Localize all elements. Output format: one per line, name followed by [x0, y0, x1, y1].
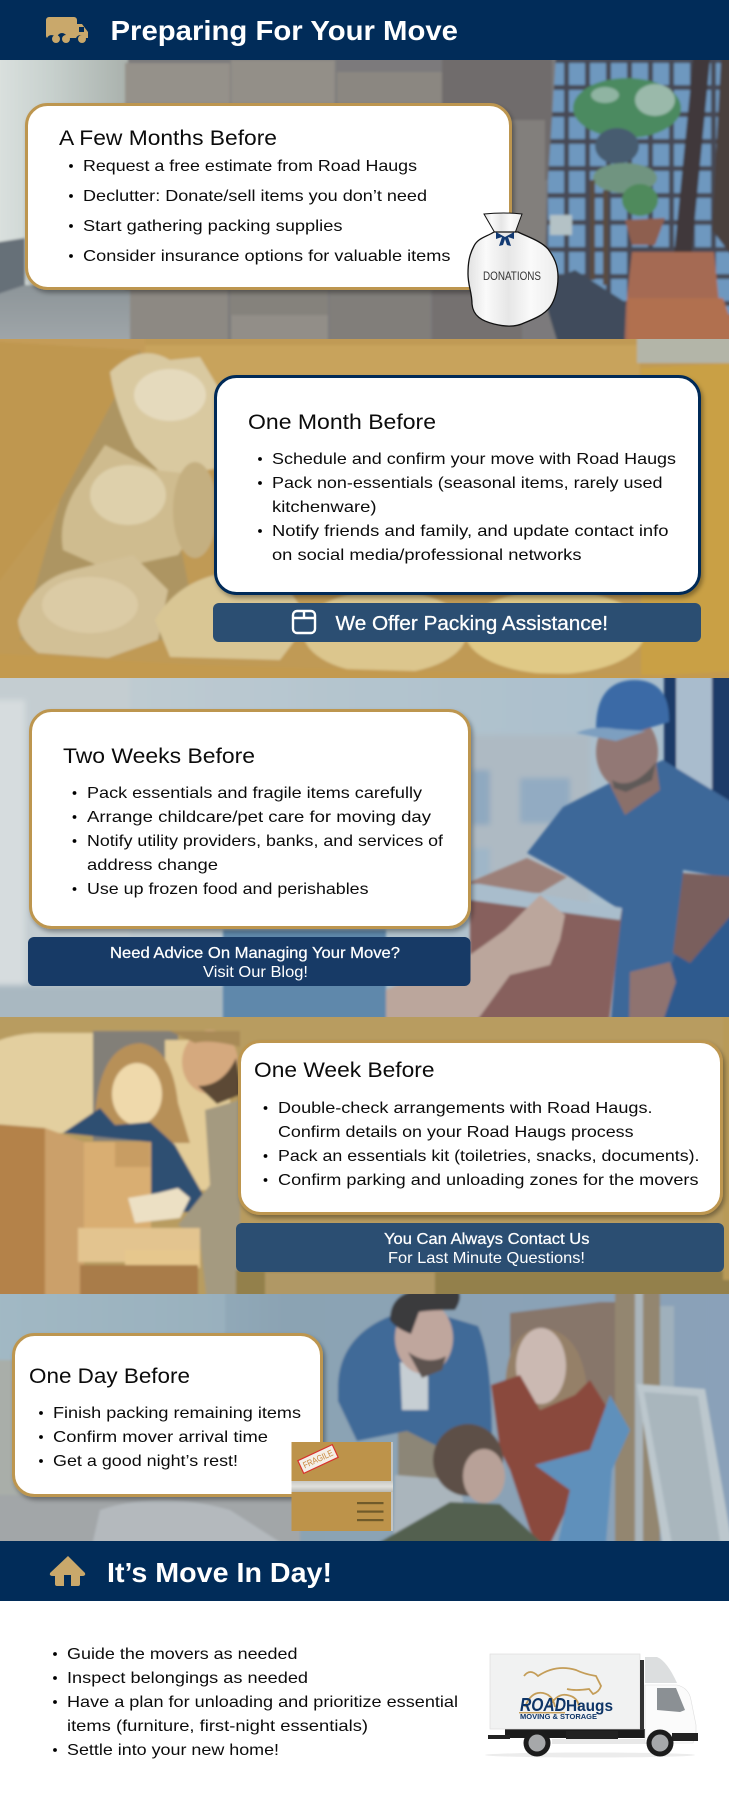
logo: road haugs: ROAD — [520, 1695, 566, 1715]
icon: road haugs moving truck — [485, 1654, 698, 1758]
panel: one day before — [0, 1294, 729, 1541]
bullet list: Pack non-essentials (seasonal items, rarely used — [272, 475, 662, 492]
header: it's move in day — [0, 1541, 729, 1601]
bullet list: Request a free estimate from Road Haugs — [83, 158, 417, 175]
panel: move in day checklist — [0, 1601, 729, 1811]
title: preparing for your move: Preparing For Your Move — [110, 15, 458, 46]
bullet list — [69, 158, 450, 265]
bullet list: Consider insurance options for valuable items — [83, 248, 450, 265]
icon: donations bag — [468, 213, 558, 326]
icon: package — [293, 611, 315, 633]
bullet list: Pack essentials and fragile items carefully — [87, 785, 422, 802]
icon: moving truck — [46, 17, 88, 43]
bullet list: Pack an essentials kit (toiletries, snacks, documents). — [278, 1148, 700, 1165]
banner: need advice on managing your move — [28, 937, 470, 986]
bullet list — [258, 451, 676, 564]
bullet list — [53, 1646, 458, 1759]
panel: one week before — [0, 1017, 729, 1294]
bullet list: Confirm parking and unloading zones for the movers — [278, 1172, 698, 1189]
heading: Two Weeks Before — [63, 744, 255, 768]
header: preparing for your move — [0, 0, 729, 60]
banner: need advice on managing your move: Need Advice On Managing Your Move? — [110, 945, 400, 962]
icon: donations bag: DONATIONS — [483, 269, 541, 283]
bullet list — [39, 1405, 301, 1470]
banner: we offer packing assistance — [213, 603, 701, 642]
heading: A Few Months Before — [59, 126, 277, 150]
photo: mover handing over a box — [0, 678, 729, 1017]
card: a few months before — [26, 104, 510, 288]
bullet list: items (furniture, first-night essentials) — [67, 1718, 368, 1735]
heading: One Day Before — [29, 1364, 190, 1388]
bullet list: address change — [87, 857, 218, 874]
bullet list: Schedule and confirm your move with Road Haugs — [272, 451, 676, 468]
panel: one month before — [0, 339, 729, 678]
banner: you can always contact us — [236, 1223, 724, 1272]
label: fragile sticker: FRAGILE — [301, 1448, 335, 1470]
card: one day before — [14, 1334, 322, 1496]
panel: two weeks before — [0, 678, 729, 1017]
bullet list: Notify utility providers, banks, and services of — [87, 833, 444, 850]
title: it's move in day: It’s Move In Day! — [107, 1557, 332, 1588]
bullet list: Notify friends and family, and update contact info — [272, 523, 669, 540]
heading: One Week Before — [254, 1058, 434, 1082]
bullet list: kitchenware) — [272, 499, 376, 516]
photo: couple packing boxes — [0, 1017, 729, 1294]
card: two weeks before — [30, 710, 470, 928]
photo: paper-wrapped items in box — [0, 339, 729, 678]
bullet list: Confirm mover arrival time — [53, 1429, 268, 1446]
logo: road haugs — [519, 1668, 613, 1721]
logo: road haugs: Haugs — [566, 1698, 613, 1715]
heading: One Month Before — [248, 410, 436, 434]
bullet list: Use up frozen food and perishables — [87, 881, 369, 898]
card: one week before — [240, 1042, 722, 1214]
banner: need advice on managing your move: Visit Our Blog! — [203, 964, 308, 981]
bullet list: Settle into your new home! — [67, 1742, 279, 1759]
card: one month before — [216, 376, 700, 594]
bullet list: Double-check arrangements with Road Haugs. — [278, 1100, 652, 1117]
icon: fragile box — [292, 1442, 393, 1531]
panel: a few months before — [0, 60, 729, 339]
bullet list: Guide the movers as needed — [67, 1646, 298, 1663]
bullet list: Have a plan for unloading and prioritize essential — [67, 1694, 458, 1711]
bullet list: Get a good night’s rest! — [53, 1453, 238, 1470]
photo: stacked boxes and window plants — [0, 60, 729, 339]
logo: road haugs: MOVING & STORAGE — [520, 1714, 597, 1721]
bullet list: Arrange childcare/pet care for moving day — [87, 809, 431, 826]
bullet list — [264, 1100, 700, 1189]
banner: we offer packing assistance: We Offer Packing Assistance! — [336, 613, 608, 635]
bullet list: Start gathering packing supplies — [83, 218, 342, 235]
bullet list: Declutter: Donate/sell items you don’t need — [83, 188, 427, 205]
icon: house — [50, 1556, 85, 1586]
bullet list: Finish packing remaining items — [53, 1405, 301, 1422]
bullet list: on social media/professional networks — [272, 547, 582, 564]
bullet list — [73, 785, 444, 898]
photo: family packing together — [0, 1294, 729, 1541]
banner: you can always contact us: For Last Minute Questions! — [388, 1250, 585, 1267]
bullet list: Inspect belongings as needed — [67, 1670, 308, 1687]
bullet list: Confirm details on your Road Haugs process — [278, 1124, 634, 1141]
banner: you can always contact us: You Can Always Contact Us — [384, 1231, 590, 1248]
